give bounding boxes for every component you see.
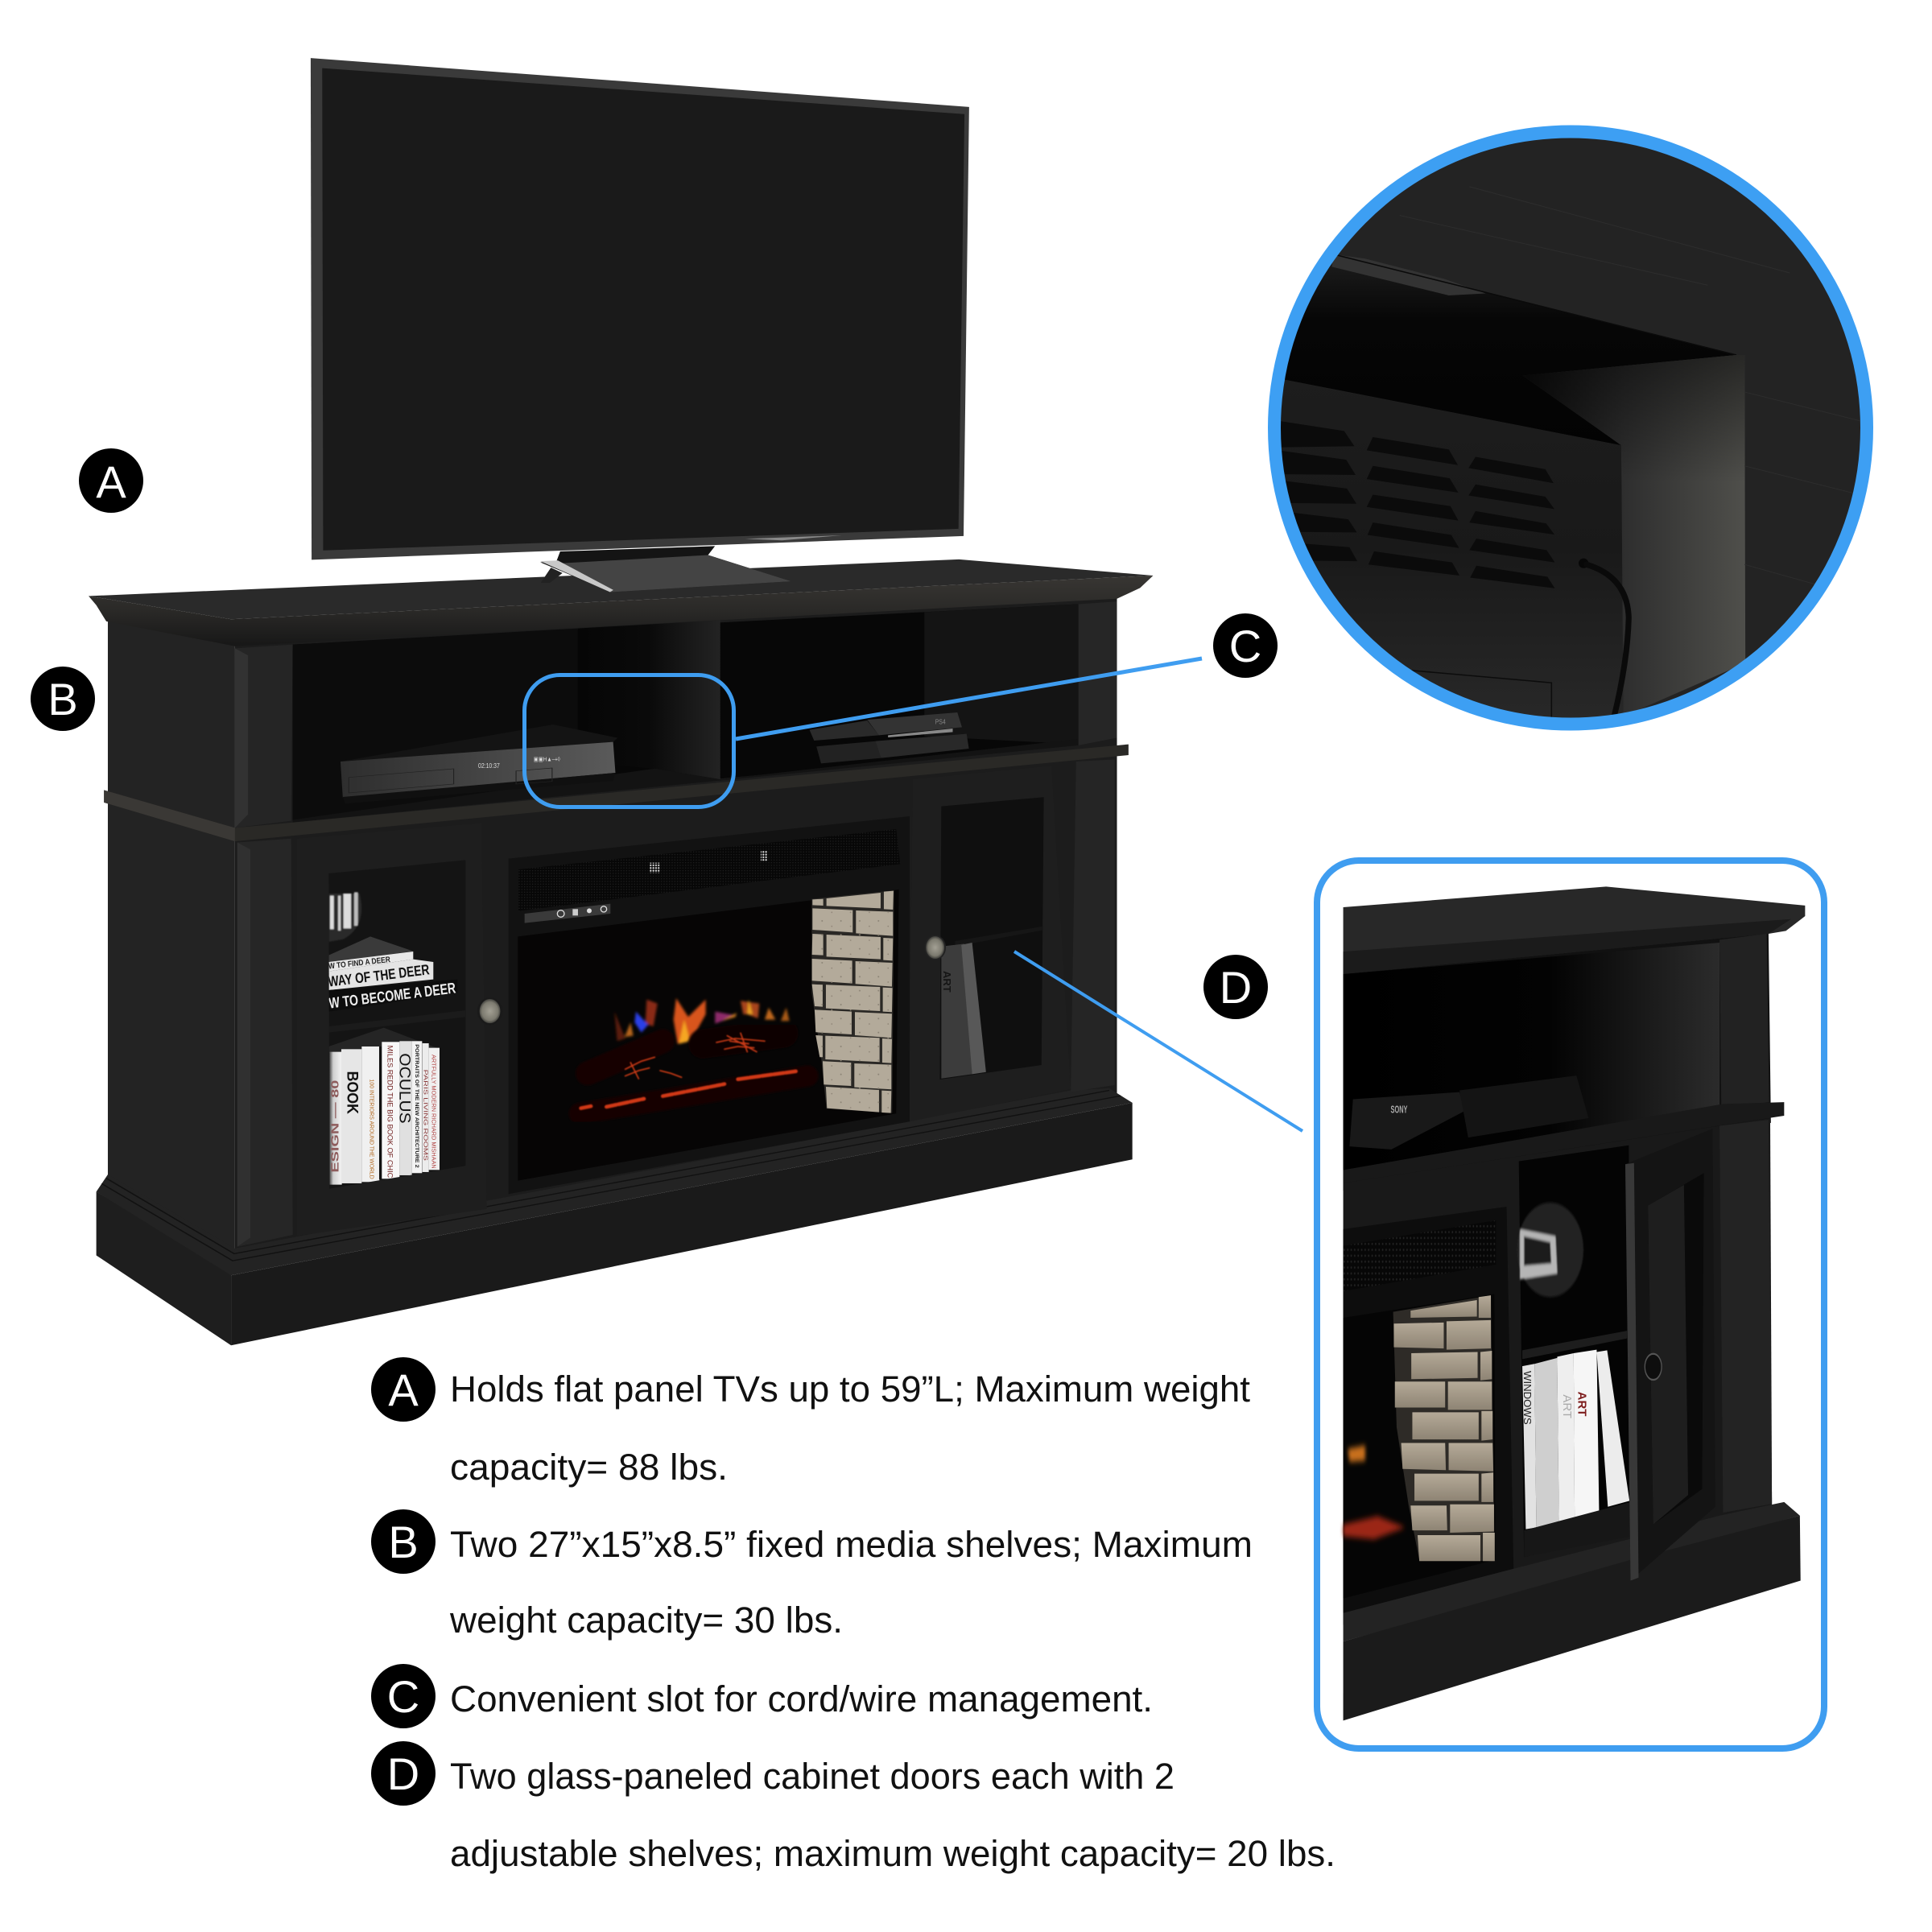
lower row of books: PORTRAITS OF THE NEW ARCHITECTURE 2 [414,1044,419,1168]
disc player: ▣▣H▲–+◊ [534,757,560,763]
shelf board [1344,1102,1784,1183]
connector line to D detail [1014,952,1302,1131]
feature A: A [388,1364,419,1415]
panel illustration [1344,886,1805,1720]
inner shelf [1522,1331,1627,1359]
console in shelf: SONY [1391,1105,1408,1116]
books in cabinet: ART [1560,1394,1573,1418]
left door glass and books [327,860,465,1189]
detail circle ring [1274,132,1867,724]
stacked books: WAY OF THE DEER [327,961,431,990]
marker C on image [1213,613,1278,678]
cabinet top [89,559,1153,646]
stacked books: W TO BECOME A DEER [328,979,457,1012]
feature B [371,1509,1253,1641]
books behind right door [941,943,972,1079]
control panel [525,904,610,923]
text on right door books: ART [941,971,953,993]
stacked books [327,936,457,1012]
disc player [341,724,617,803]
glass vase [1517,1203,1583,1297]
lower row of books: BOOK [343,1071,360,1114]
lower right pilaster [1071,759,1115,1092]
open media shelves [293,604,1079,823]
television [311,58,969,592]
cabinet interior [1519,1146,1631,1557]
back board with vents [1285,464,1622,572]
feature D: adjustable shelves; maximum weight capacity= 20 lbs. [450,1833,1335,1874]
left door frame [296,823,487,1236]
feature C: Convenient slot for cord/wire management. [450,1678,1153,1719]
books in cabinet: ART [1575,1392,1587,1416]
speaker mesh [518,829,900,911]
stacked books: W TO FIND A DEER [328,956,390,972]
right pilaster [1719,1120,1772,1513]
books in cabinet [1521,1350,1631,1557]
lower row of books: OCULUS [396,1053,413,1124]
callout: blue rounded rectangle around cord slot [525,675,734,807]
connector line to C detail [736,658,1202,739]
legend list [371,1357,1335,1874]
vertical column [1523,355,1745,716]
fireplace insert [509,816,910,1194]
game console: PS4 [935,718,946,726]
feature C [371,1664,1153,1728]
left door knob [478,998,502,1024]
fireplace [1344,1207,1513,1613]
plinth [1344,1502,1801,1720]
marker A on image: A [96,456,126,507]
open upper shelf [1344,943,1719,1170]
feature B: B [388,1517,419,1567]
marker D on image [1203,955,1268,1019]
cabinet side [108,613,235,1273]
detail circle: cord slot close-up [1281,138,1860,718]
lower left pilaster [237,839,293,1247]
marker D on image: D [1220,962,1252,1013]
feature B: weight capacity= 30 lbs. [449,1600,843,1641]
marker C on image: C [1229,621,1261,671]
TV stand cabinet with fireplace [89,559,1153,1345]
feature D [371,1741,1335,1874]
lower row of books: ESIGN — 80 [329,1080,341,1173]
feature D: Two glass-paneled cabinet doors each with 2 [450,1756,1174,1797]
marker B on image [31,667,95,731]
feature D: D [387,1748,419,1799]
marker A on image [79,448,143,513]
mid shelf edge [104,745,1129,841]
cabinet front [235,593,1117,1273]
books in cabinet: WINDOWS [1521,1371,1534,1425]
firebox [518,890,899,1181]
power cord [1579,559,1629,720]
marker B on image: B [47,674,78,724]
open door [1625,1129,1715,1580]
wood grain highlight lines [1400,187,1860,593]
console in shelf [1349,1075,1588,1150]
game console [810,712,969,763]
glowing logs [580,1033,807,1113]
panel frame [1317,861,1824,1748]
media devices [341,712,969,803]
upper right pilaster [1079,601,1117,745]
right door [909,766,1071,1121]
shadow under shelf [1272,254,1736,445]
right door knob [925,935,945,960]
feature C: C [387,1671,419,1722]
lower row of books: MILES REDD THE BIG BOOK OF CHIC [386,1046,394,1179]
striped vase [328,892,361,942]
upper left pilaster [235,645,293,828]
feature A [371,1357,1250,1488]
feature A: Holds flat panel TVs up to 59”L; Maximum weight [450,1368,1250,1410]
plinth base [97,1088,1133,1345]
disc player: 02:10:37 [478,762,500,770]
flames [614,998,790,1044]
lower row of books: PARIS LIVING ROOMS [422,1070,429,1161]
lower row of books: 100 INTERIORS AROUND THE WORLD [369,1080,374,1179]
lower body [1344,1118,1772,1624]
detail panel D: open cabinet door [1317,861,1824,1748]
feature A: capacity= 88 lbs. [450,1447,728,1488]
feature B: Two 27”x15”x8.5” fixed media shelves; Maximum [450,1524,1253,1565]
brick wall [811,890,894,1113]
lower row of books: ARTFULLY MODERN RICHARD MISHAAN [430,1055,436,1169]
lower row of books [328,1028,440,1185]
